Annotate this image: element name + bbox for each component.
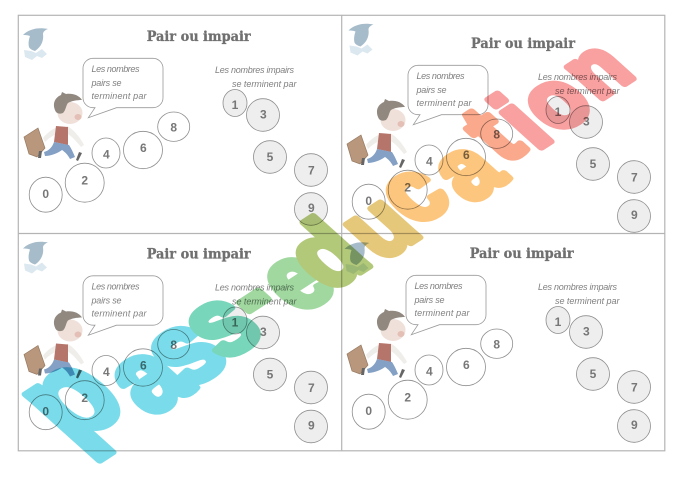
odd number circles: 9 [308, 418, 315, 432]
speech bubble: even numbers: pairs se [90, 296, 122, 306]
even number circles [352, 119, 513, 219]
panel: top left worksheet [23, 28, 328, 225]
watermark: pass-education: -e [191, 218, 358, 350]
odd number circles: 9 [631, 208, 638, 222]
icon: dolphin [23, 28, 48, 60]
speech bubble: even numbers: pairs se [90, 78, 122, 88]
text: odd numbers: se terminent par [232, 79, 298, 89]
text: odd numbers: se terminent par [555, 86, 620, 96]
speech bubble: even numbers: Les nombres [92, 64, 140, 74]
odd number circles: 3 [260, 108, 267, 122]
speech bubble: even numbers: Les nombres [416, 71, 465, 81]
icon: dolphin [344, 242, 370, 274]
text: odd numbers [538, 72, 620, 96]
speech bubble: even numbers [406, 275, 486, 335]
speech bubble: even numbers [408, 65, 488, 125]
odd number circles [223, 307, 328, 443]
title: Pair ou impair [147, 246, 251, 262]
even number circles: 2 [404, 390, 411, 404]
odd number circles [546, 96, 650, 232]
illustration: running boy [347, 99, 407, 168]
watermark: pass-education: a [74, 318, 216, 434]
odd number circles: 1 [555, 105, 562, 119]
odd number circles: 3 [583, 115, 590, 129]
panel: bottom left worksheet [23, 242, 328, 443]
title: Pair ou impair [471, 36, 576, 52]
even number circles: 6 [140, 358, 147, 372]
even number circles: 8 [493, 128, 500, 142]
even number circles [352, 329, 513, 429]
even number circles: 6 [140, 141, 147, 155]
odd number circles: 9 [308, 201, 315, 215]
text: odd numbers [215, 282, 298, 306]
watermark: pass-education: o [494, 53, 613, 149]
illustration: running boy [347, 309, 407, 378]
even number circles: 0 [365, 194, 372, 208]
odd number circles: 1 [232, 316, 239, 330]
even number circles: 8 [170, 121, 177, 135]
even number circles: 8 [493, 338, 500, 352]
odd number circles: 9 [631, 418, 638, 432]
odd number circles: 5 [267, 150, 274, 164]
even number circles: 6 [463, 148, 470, 162]
even number circles [29, 330, 190, 430]
speech bubble: even numbers: Les nombres [414, 281, 463, 291]
watermark: pass-education: t [438, 90, 544, 179]
even number circles: 4 [426, 154, 433, 168]
icon: dolphin [23, 242, 48, 274]
odd number circles: 5 [590, 367, 597, 381]
panel: bottom right worksheet [344, 242, 650, 442]
text: odd numbers: Les nombres impairs [215, 65, 294, 75]
title: Pair ou impair [147, 29, 251, 45]
odd number circles: 5 [590, 157, 597, 171]
even number circles: 4 [103, 365, 110, 379]
watermark: pass-education: u [315, 175, 440, 277]
speech bubble: even numbers [83, 276, 163, 335]
watermark: pass-education: s [151, 268, 285, 378]
text: odd numbers [215, 65, 298, 89]
watermark: pass-education: s [110, 291, 252, 407]
speech bubble: even numbers: Les nombres [92, 282, 140, 292]
panel: top right worksheet [347, 24, 650, 232]
speech bubble: even numbers: terminent par [414, 308, 470, 318]
even number circles: 6 [463, 358, 470, 372]
even number circles: 2 [404, 180, 411, 194]
odd number circles: 7 [308, 163, 315, 177]
odd number circles: 3 [260, 325, 267, 339]
even number circles: 0 [365, 404, 372, 418]
illustration: running boy [24, 310, 84, 378]
even number circles [29, 112, 190, 212]
even number circles: 4 [103, 147, 110, 161]
text: odd numbers: se terminent par [555, 296, 620, 306]
watermark: pass-education: n [539, 23, 651, 114]
even number circles: 2 [81, 391, 88, 405]
speech bubble: even numbers: pairs se [414, 295, 444, 305]
even number circles: 2 [81, 173, 88, 187]
speech bubble: even numbers: pairs se [416, 85, 446, 95]
text: odd numbers: Les nombres impairs [538, 282, 618, 292]
text: odd numbers: se terminent par [232, 296, 298, 306]
even number circles: 0 [42, 187, 49, 201]
even number circles: 4 [426, 364, 433, 378]
watermark: pass-education: d [259, 200, 391, 308]
odd number circles: 3 [583, 325, 590, 339]
speech bubble: even numbers: terminent par [92, 308, 148, 318]
watermark: pass-education: ca [350, 112, 526, 249]
text: odd numbers: Les nombres impairs [215, 282, 294, 292]
odd number circles: 5 [267, 368, 274, 382]
odd number circles [223, 90, 328, 225]
odd number circles: 1 [232, 98, 239, 112]
odd number circles: 7 [631, 380, 638, 394]
even number circles: 0 [42, 404, 49, 418]
watermark: pass-education: i [470, 79, 572, 165]
title: Pair ou impair [470, 246, 574, 262]
speech bubble: even numbers: terminent par [416, 98, 472, 108]
odd number circles: 1 [555, 315, 562, 329]
speech bubble: even numbers [83, 58, 163, 118]
illustration: running boy [24, 92, 84, 161]
text: odd numbers [538, 282, 620, 306]
odd number circles [546, 306, 650, 442]
even number circles: 8 [170, 338, 177, 352]
icon: dolphin [348, 24, 374, 56]
text: odd numbers: Les nombres impairs [538, 72, 618, 82]
speech bubble: even numbers: terminent par [92, 91, 148, 101]
odd number circles: 7 [631, 170, 638, 184]
odd number circles: 7 [308, 381, 315, 395]
